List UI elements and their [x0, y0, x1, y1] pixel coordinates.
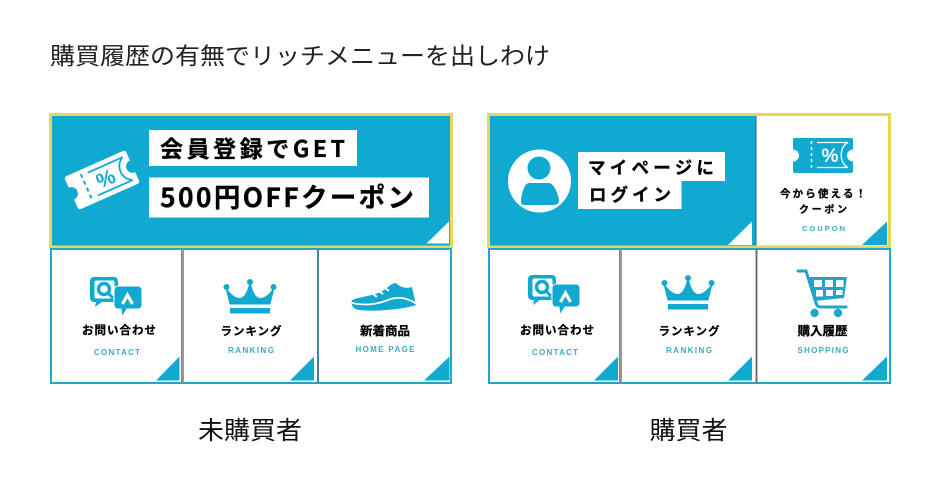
menu cell: new arrivals: 新着商品	[360, 323, 410, 338]
menu cell: ranking	[182, 249, 318, 383]
icon: blue ticket: %	[822, 146, 839, 167]
icon: shopping cart	[798, 271, 847, 317]
cell: coupon	[780, 138, 887, 245]
caption: non-purchaser: 未購買者	[198, 417, 302, 445]
menu cell: contact: お問い合わせ	[520, 323, 594, 337]
menu cell: ranking: RANKING	[228, 346, 274, 355]
icon: Q and A	[90, 277, 142, 317]
icon: user avatar	[508, 150, 571, 212]
icon: crown	[662, 275, 714, 310]
label: 500 yen off coupon: 500円OFFクーポン	[160, 176, 414, 215]
icon: crown	[224, 279, 276, 314]
cell: coupon: COUPON	[802, 224, 845, 233]
cell: coupon: クーポン	[799, 204, 847, 216]
label: my page login: マイページに	[588, 155, 714, 180]
menu cell: ranking: RANKING	[666, 346, 712, 355]
label: my page login: ログイン	[589, 182, 671, 207]
menu cell: contact	[51, 249, 182, 383]
banner: my page login	[490, 116, 756, 246]
label: my page login	[578, 152, 725, 209]
icon: Q and A	[528, 275, 580, 315]
caption: purchaser: 購買者	[650, 417, 728, 445]
menu cell: shopping: SHOPPING	[798, 346, 848, 355]
panel: non-purchaser menu	[50, 114, 452, 383]
menu cell: contact: お問い合わせ	[82, 323, 156, 337]
outer frame	[488, 114, 890, 247]
menu cell: shopping: 購入履歴	[798, 323, 848, 338]
icon: white ticket: %	[93, 165, 120, 194]
menu cell: contact: CONTACT	[532, 348, 578, 357]
label: member registration: 会員登録でGET	[160, 130, 345, 164]
fold corner	[426, 222, 449, 244]
menu cell: shopping	[756, 249, 890, 383]
menu cell: ranking: ランキング	[658, 324, 720, 338]
menu cell: ranking: ランキング	[220, 324, 282, 338]
menu cell: contact: CONTACT	[94, 348, 140, 357]
title: 購買履歴の有無でリッチメニューを出しわけ	[50, 43, 550, 69]
menu cell: contact	[489, 249, 620, 383]
cell: coupon: 今から使える！	[780, 187, 866, 200]
menu cell: new arrivals: HOME PAGE	[356, 345, 415, 354]
menu cell: new arrivals	[318, 249, 451, 383]
banner: member coupon	[50, 114, 452, 247]
icon: white ticket	[64, 150, 140, 210]
menu cell: ranking	[620, 249, 756, 383]
panel: purchaser menu	[488, 114, 890, 383]
icon: sneaker	[352, 283, 417, 311]
fold corner	[728, 222, 752, 245]
